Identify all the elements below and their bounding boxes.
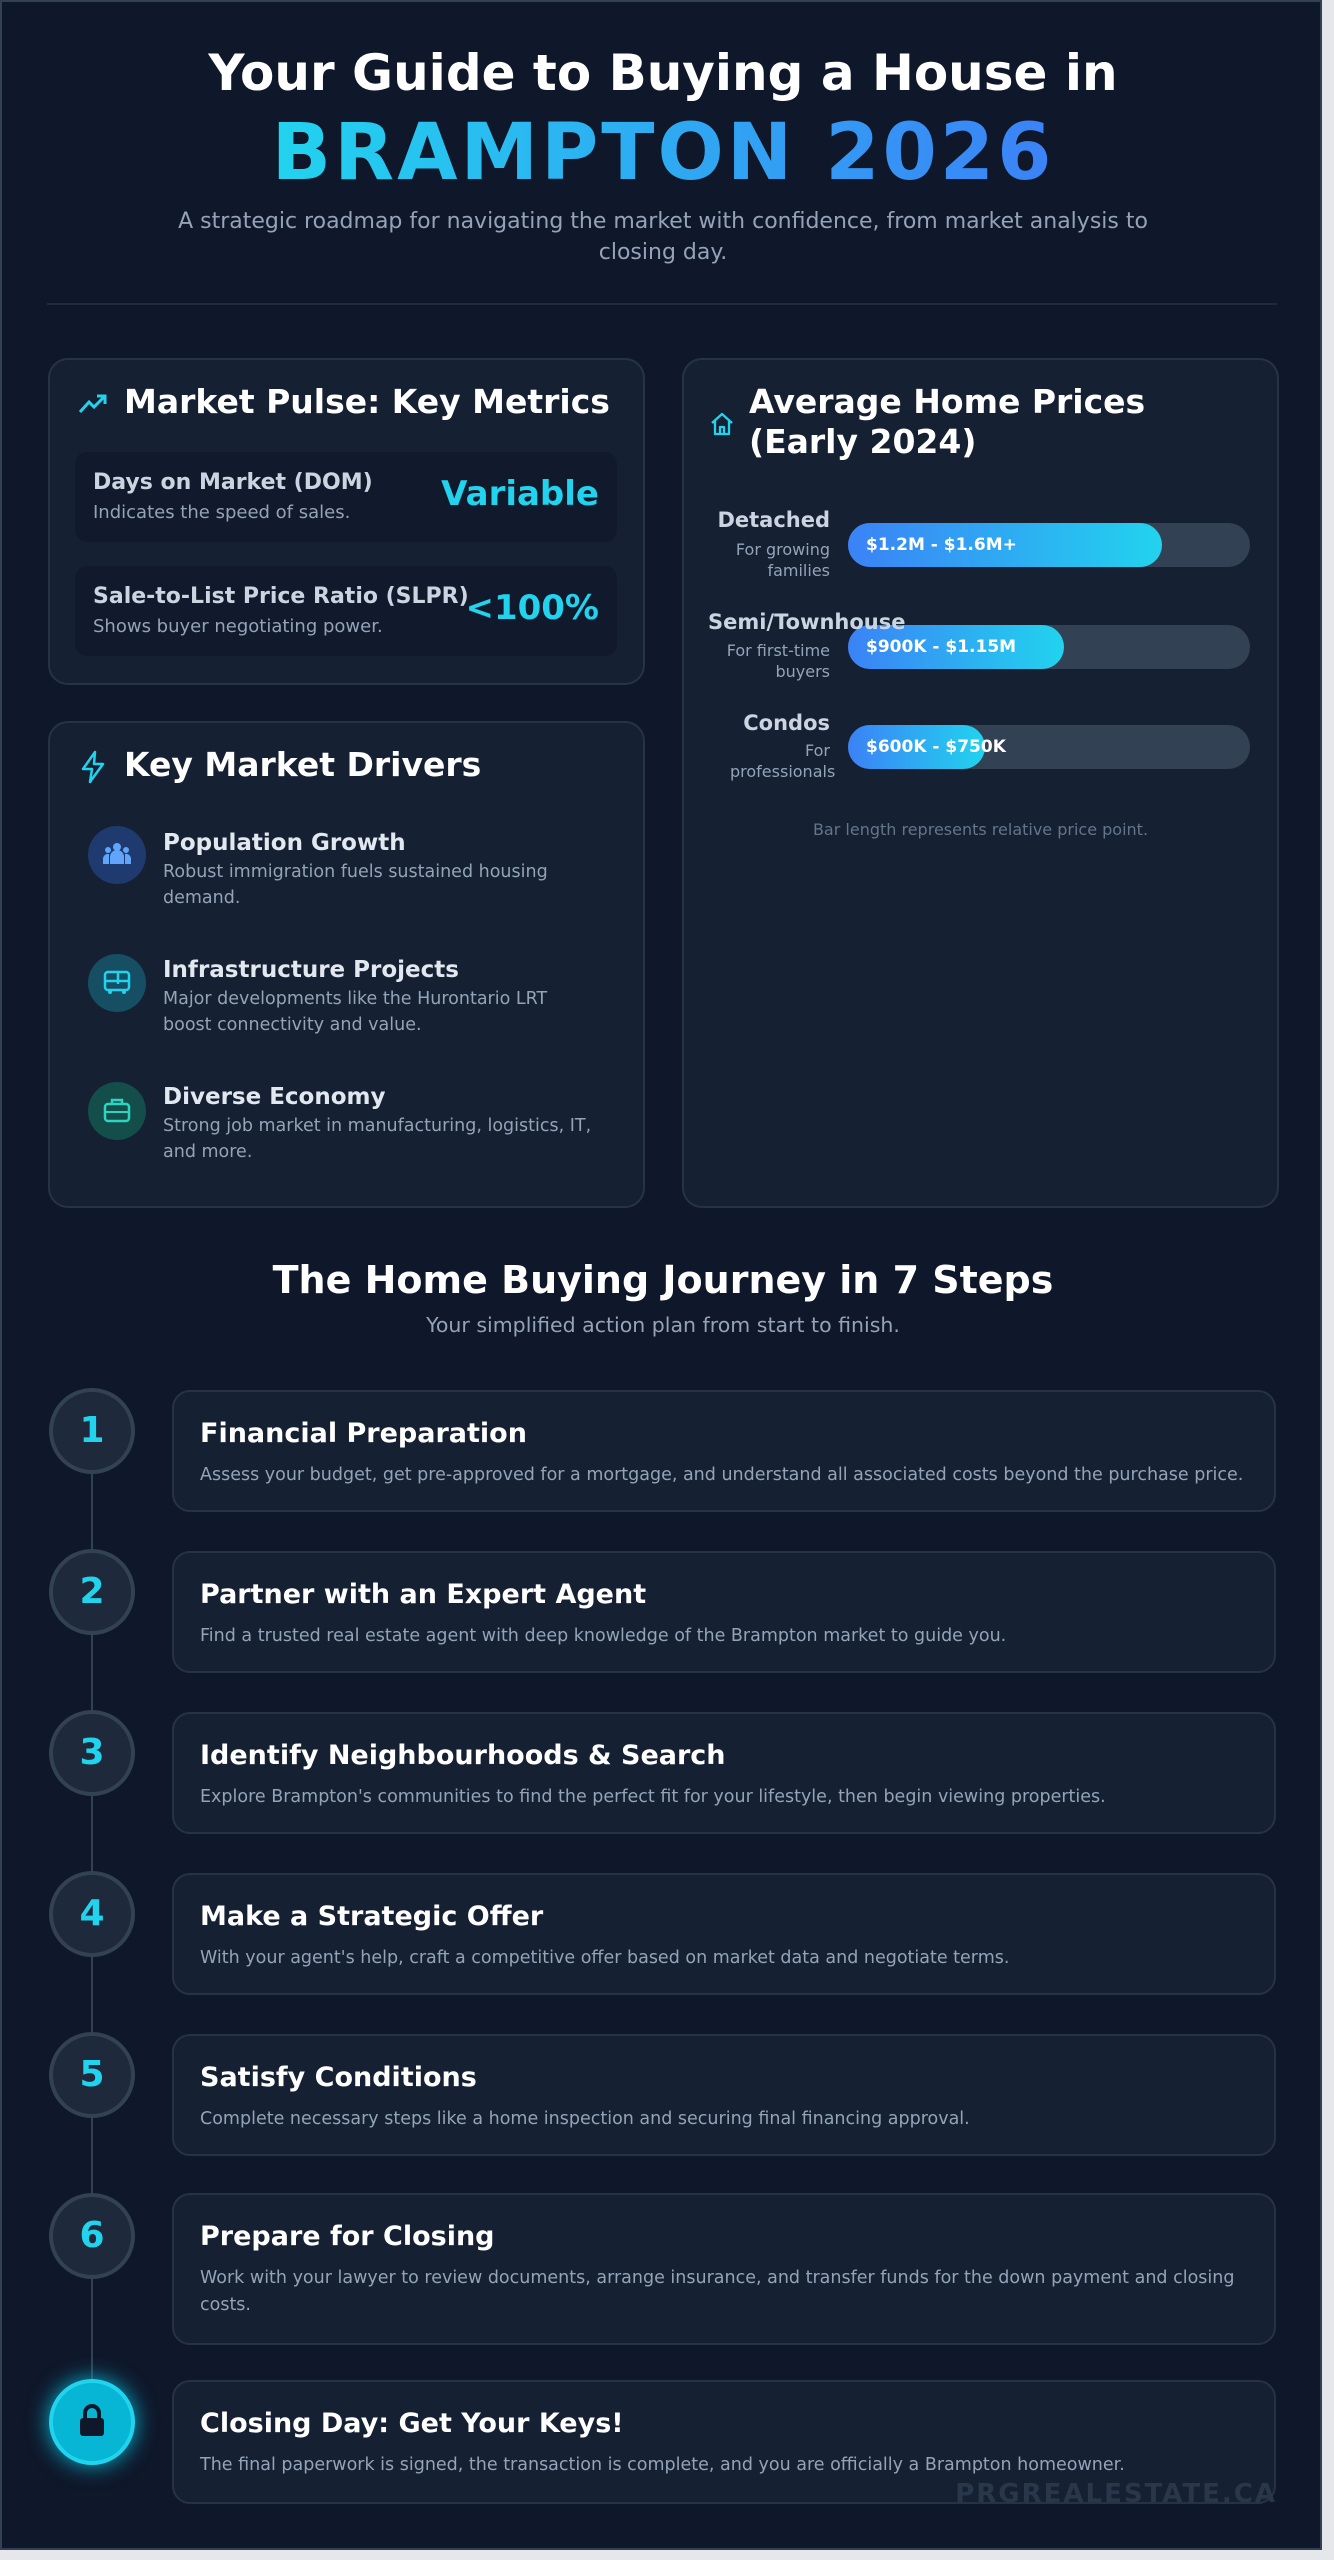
panel: key drivers	[48, 721, 645, 1208]
step 1: 1	[79, 1410, 105, 1451]
step 4	[49, 1871, 1276, 1995]
driver: population: Population Growth	[163, 830, 406, 856]
driver: economy	[88, 1082, 591, 1162]
heading: journey: The Home Buying Journey in 7 Steps	[273, 1258, 1053, 1302]
subtitle: journey: Your simplified action plan from start to finish.	[426, 1313, 900, 1337]
bar: semi: Semi/Townhouse	[708, 610, 906, 634]
metric: SLPR: <100%	[465, 588, 599, 628]
panel: market pulse	[48, 358, 645, 685]
heading: key drivers: Key Market Drivers	[124, 745, 481, 784]
bar: condos	[730, 711, 1250, 781]
step 7: Closing Day: Get Your Keys!	[200, 2408, 624, 2439]
step 2: 2	[79, 1571, 105, 1612]
step 4: Make a Strategic Offer	[200, 1901, 543, 1932]
title: Your Guide to Buying a House in	[208, 44, 1118, 102]
step 1: Financial Preparation	[200, 1418, 527, 1449]
metric: DOM	[75, 452, 617, 542]
panel: home prices	[682, 358, 1279, 1208]
heading: prices: Average Home Prices (Early 2024)	[749, 382, 1145, 461]
icon: lock	[49, 2379, 135, 2465]
bar: semi: For first-time buyers	[727, 641, 830, 681]
metric: DOM: Variable	[441, 474, 599, 514]
heading: market pulse: Market Pulse: Key Metrics	[124, 382, 610, 421]
driver: infrastructure: Infrastructure Projects	[163, 957, 459, 983]
bar: detached: For growing families	[736, 540, 830, 580]
caption: Bar length represents relative price point.	[813, 820, 1148, 839]
watermark: PRGREALESTATE.CA	[955, 2479, 1277, 2509]
metric: SLPR: Shows buyer negotiating power.	[93, 616, 383, 637]
driver: population	[88, 826, 548, 908]
bar: detached: Detached	[717, 508, 830, 532]
step 5	[49, 2032, 1276, 2156]
driver: infrastructure: Major developments like the Hurontario LRT boost connectivity and value.	[163, 989, 547, 1035]
step 2	[49, 1549, 1276, 1673]
step 6	[49, 2193, 1276, 2345]
step 3: 3	[79, 1732, 105, 1773]
title	[208, 44, 1118, 198]
title: BRAMPTON 2026	[272, 108, 1054, 198]
step 4: 4	[79, 1893, 105, 1934]
icon: trend	[79, 394, 106, 413]
step 6: Work with your lawyer to review documents, arrange insurance, and transfer funds for the down payment and closing costs.	[200, 2268, 1234, 2315]
bar: detached: $1.2M - $1.6M+	[866, 535, 1017, 555]
step 3	[49, 1710, 1276, 1834]
step 2: Find a trusted real estate agent with deep knowledge of the Brampton market to guide you.	[200, 1626, 1006, 1646]
step 4: With your agent's help, craft a competitive offer based on market data and negotiate terms.	[200, 1948, 1009, 1968]
step 2: Partner with an Expert Agent	[200, 1579, 646, 1610]
step 3: Identify Neighbourhoods & Search	[200, 1740, 726, 1771]
bar: detached	[717, 508, 1250, 580]
step 1	[49, 1388, 1276, 1512]
bar: condos: For professionals	[730, 741, 835, 781]
bar: condos: $600K - $750K	[866, 737, 1006, 757]
icon: bolt	[82, 750, 104, 784]
driver: population: Robust immigration fuels sustained housing demand.	[163, 862, 548, 908]
bar: semi	[708, 610, 1250, 681]
step 7: The final paperwork is signed, the transaction is complete, and you are officially a Brampton homeowner.	[200, 2455, 1125, 2475]
icon: house	[711, 412, 733, 436]
step 5: Satisfy Conditions	[200, 2062, 477, 2093]
step 7	[34, 2364, 1276, 2504]
subtitle: A strategic roadmap for navigating the market with confidence, from market analysis to closing day.	[178, 209, 1148, 265]
step 5: 5	[79, 2054, 105, 2095]
metric: DOM: Indicates the speed of sales.	[93, 502, 350, 523]
bar: condos: Condos	[743, 711, 830, 735]
driver: economy: Diverse Economy	[163, 1084, 386, 1110]
metric: SLPR: Sale-to-List Price Ratio (SLPR)	[93, 584, 469, 609]
metric: SLPR	[75, 566, 617, 656]
step 6: 6	[79, 2215, 105, 2256]
metric: DOM: Days on Market (DOM)	[93, 470, 373, 495]
driver: economy: Strong job market in manufacturing, logistics, IT, and more.	[163, 1116, 591, 1162]
step 5: Complete necessary steps like a home inspection and securing final financing approval.	[200, 2109, 970, 2129]
bar: semi: $900K - $1.15M	[866, 637, 1016, 657]
step 1: Assess your budget, get pre-approved for a mortgage, and understand all associated costs beyond the purchase price.	[200, 1465, 1243, 1485]
step 6: Prepare for Closing	[200, 2221, 494, 2252]
step 3: Explore Brampton's communities to find the perfect fit for your lifestyle, then begin viewing properties.	[200, 1787, 1106, 1807]
driver: infrastructure	[88, 954, 548, 1035]
